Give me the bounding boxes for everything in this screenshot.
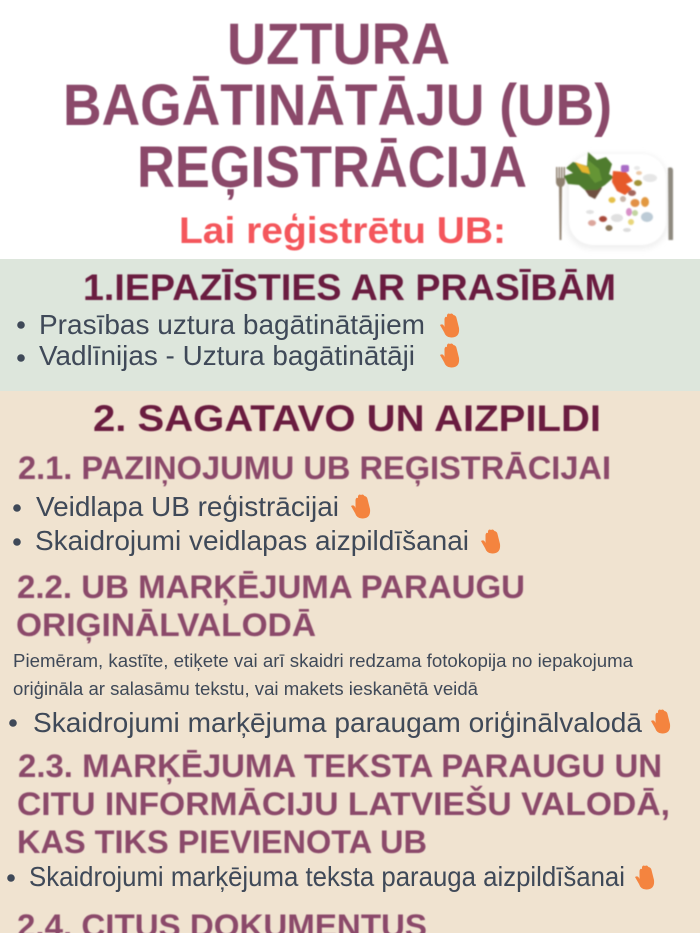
heading: 2.2: 2.2. UB MARĶĒJUMA PARAUGU [17,569,525,605]
list item: Veidlapa UB reģistrācijai: Veidlapa UB reģistrācijai [36,491,339,522]
heading: 2.2: ORIĢINĀLVALODĀ [16,607,316,643]
heading: 2.3: 2.3. MARĶĒJUMA TEKSTA PARAUGU UN [18,748,662,784]
heading: step 2: 2. SAGATAVO UN AIZPILDI [93,398,601,439]
title [63,12,612,200]
list item: Vadlīnijas - Uztura bagātinātāji: Vadlīnijas - Uztura bagātinātāji [39,340,415,371]
heading: 2.1: 2.1. PAZIŅOJUMU UB REĢISTRĀCIJAI [18,450,611,486]
heading: 2.3: KAS TIKS PIEVIENOTA UB [17,824,427,860]
list item: Prasības uztura bagātinātājiem: Prasības uztura bagātinātājiem [39,309,425,340]
panel: step 1 background [0,259,700,391]
text block: example note [13,651,634,699]
icon: plate with food and supplements [556,152,673,249]
list item: Skaidrojumi marķējuma paraugam oriģinālvalodā: Skaidrojumi marķējuma paraugam oriģinālvalodā [33,707,642,738]
title: REĢISTRĀCIJA [137,135,527,200]
list item: Skaidrojumi marķējuma teksta parauga aizpildīšanai: Skaidrojumi marķējuma teksta parauga aizpildīšanai [29,861,625,892]
list item: Skaidrojumi veidlapas aizpildīšanai: Skaidrojumi veidlapas aizpildīšanai [35,525,469,556]
heading: 2.3: CITU INFORMĀCIJU LATVIEŠU VALODĀ, [17,786,670,822]
heading: 2.3 [17,748,670,860]
panel: step 2 background [0,391,700,933]
heading: step 1: 1.IEPAZĪSTIES AR PRASĪBĀM [83,267,616,308]
subtitle: Lai reģistrētu UB: [179,210,506,251]
title: UZTURA [227,12,450,77]
panel: header background [0,0,700,259]
heading: 2.2 [16,569,525,643]
text block: example note: oriģināla ar salasāmu tekstu, vai makets ieskanētā veidā [13,679,479,699]
text block: example note: Piemēram, kastīte, etiķete vai arī skaidri redzama fotokopija no iepakojuma [13,651,634,671]
title: BAGĀTINĀTĀJU (UB) [63,73,612,138]
